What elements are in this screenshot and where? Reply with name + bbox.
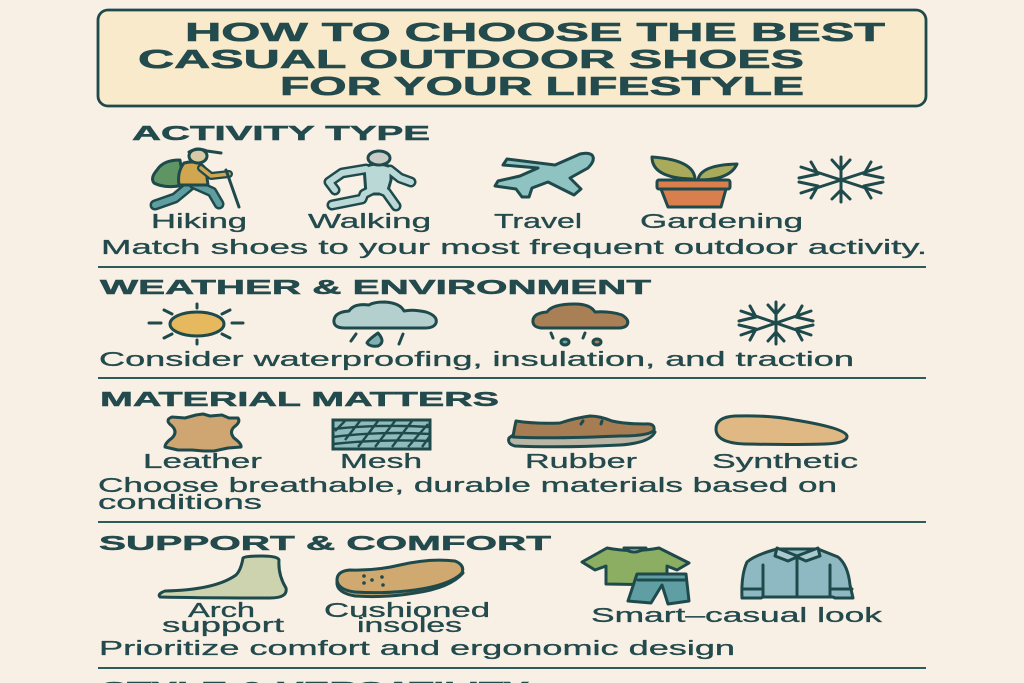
label: smart-casual look: Smart–casual look bbox=[591, 605, 884, 627]
title banner bbox=[98, 10, 926, 106]
label: rubber: Rubber bbox=[525, 451, 638, 473]
activity tip: Match shoes to your most frequent outdoor activity. bbox=[101, 237, 927, 259]
icon: leather hide bbox=[165, 414, 241, 451]
icon: mesh bbox=[333, 420, 430, 449]
label: synthetic: Synthetic bbox=[712, 451, 858, 473]
title banner: CASUAL OUTDOOR SHOES bbox=[138, 44, 804, 74]
icon: sun bbox=[149, 304, 243, 344]
material tip: conditions bbox=[98, 492, 262, 514]
icon: snowflake bbox=[799, 157, 883, 202]
label: gardening: Gardening bbox=[640, 211, 803, 233]
label: cushioned insoles bbox=[324, 600, 490, 637]
icon: airplane bbox=[495, 153, 593, 197]
heading: weather and environment: WEATHER & ENVIRONMENT bbox=[100, 276, 652, 299]
label: mesh: Mesh bbox=[340, 451, 422, 473]
icon: rubber shoe bbox=[509, 416, 655, 447]
label: hiking: Hiking bbox=[151, 211, 247, 233]
panel: weather and environment bbox=[99, 276, 854, 371]
panel: activity type bbox=[101, 122, 927, 259]
icon: synthetic sole bbox=[716, 416, 847, 444]
label: cushioned insoles: Cushioned bbox=[324, 600, 490, 622]
title banner: FOR YOUR LIFESTYLE bbox=[280, 71, 804, 101]
icon: jacket bbox=[742, 548, 853, 598]
label: cushioned insoles: insoles bbox=[357, 615, 462, 637]
label: arch support: support bbox=[162, 615, 285, 637]
icon: t-shirt and shorts bbox=[582, 548, 689, 604]
icon: arch foot bbox=[159, 556, 286, 598]
weather tip: Consider waterproofing, insulation, and traction bbox=[99, 349, 854, 371]
material tip: Choose breathable, durable materials based on bbox=[98, 475, 837, 497]
panel: support and comfort bbox=[99, 532, 884, 660]
icon: hiker bbox=[153, 149, 239, 207]
heading: material matters: MATERIAL MATTERS bbox=[100, 388, 499, 411]
icon: walker bbox=[329, 151, 411, 206]
icon: potted plant bbox=[652, 157, 737, 207]
label: walking: Walking bbox=[308, 211, 431, 233]
label: arch support bbox=[162, 600, 285, 637]
label: travel: Travel bbox=[494, 211, 582, 233]
material tip bbox=[98, 475, 837, 514]
heading: activity type: ACTIVITY TYPE bbox=[132, 122, 430, 145]
icon: rain cloud bbox=[334, 302, 436, 346]
icon: cushioned insole bbox=[337, 560, 463, 597]
comfort tip: Prioritize comfort and ergonomic design bbox=[99, 638, 735, 660]
icon: snowflake bbox=[739, 302, 813, 344]
heading: support and comfort: SUPPORT & COMFORT bbox=[99, 532, 552, 555]
title banner: HOW TO CHOOSE THE BEST bbox=[185, 17, 885, 47]
panel: material matters bbox=[98, 388, 858, 514]
label: arch support: Arch bbox=[188, 600, 255, 622]
label: leather: Leather bbox=[143, 451, 263, 473]
icon: dust cloud bbox=[533, 304, 628, 345]
